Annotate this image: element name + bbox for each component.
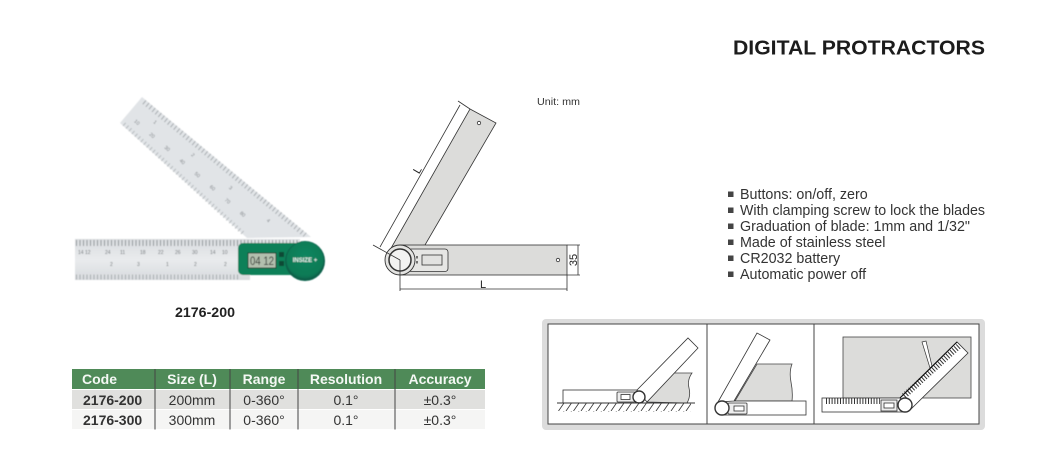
- angled steel blade: 30: [163, 145, 171, 153]
- angled steel blade: 20: [148, 132, 156, 140]
- dimension label: angled L: L: [411, 165, 425, 176]
- display housing: [408, 249, 448, 272]
- feature list: Graduation of blade: 1mm and 1/32": [740, 219, 970, 235]
- table row 2176-300: 300mm: [169, 412, 215, 428]
- horizontal steel blade: 24: [105, 250, 111, 256]
- specification table: [72, 369, 485, 430]
- angled steel blade: 40: [178, 158, 186, 166]
- table header: Size (L): [167, 371, 217, 387]
- table row 2176-300: [72, 410, 485, 429]
- LCD readout: 04 12: [250, 254, 274, 268]
- horizontal steel blade: 1: [166, 262, 169, 268]
- angled steel blade: 80: [238, 211, 246, 219]
- angled steel blade: [120, 97, 311, 238]
- dimension label: 35: 35: [568, 254, 580, 266]
- unit label: Unit: mm: [537, 97, 580, 108]
- table row 2176-200: 200mm: [169, 392, 215, 408]
- horizontal steel blade: 14: [210, 250, 216, 256]
- angled steel blade: 2: [189, 152, 196, 159]
- table header: Accuracy: [408, 371, 472, 387]
- dimension drawing: [373, 101, 580, 291]
- feature list: Automatic power off: [740, 267, 866, 283]
- usage 1: measuring a slope on a surface: [557, 338, 698, 412]
- angled blade outline: [390, 109, 496, 250]
- horizontal steel blade: 11: [120, 250, 125, 256]
- green rotary knob: [285, 241, 325, 281]
- horizontal steel blade: 14 12: [78, 250, 91, 256]
- table row 2176-200: ±0.3°: [424, 392, 456, 408]
- table row 2176-300: ±0.3°: [424, 412, 456, 428]
- horizontal steel blade: 10: [222, 250, 228, 256]
- angled steel blade: 3: [227, 185, 233, 192]
- horizontal steel blade: 18: [140, 250, 146, 256]
- table header: [72, 369, 485, 389]
- product code caption: 2176-200: [175, 304, 235, 320]
- feature list: [728, 187, 985, 283]
- horizontal steel blade: 22: [158, 250, 164, 256]
- horizontal steel blade: 26: [175, 250, 181, 256]
- table header: Range: [243, 371, 286, 387]
- pivot circle: [385, 245, 415, 275]
- angled steel blade: 70: [223, 197, 231, 206]
- table header: Resolution: [310, 371, 382, 387]
- green display housing: [238, 243, 300, 275]
- table row 2176-200: 0-360°: [243, 392, 285, 408]
- title: DIGITAL PROTRACTORS: [733, 38, 985, 60]
- horizontal steel blade: 30: [192, 250, 198, 256]
- horizontal steel blade: 2: [110, 262, 113, 268]
- table row 2176-200: 2176-200: [83, 392, 142, 408]
- horizontal length dimension: [400, 260, 567, 291]
- usage 3: marking a workpiece: [822, 337, 971, 412]
- usage illustration panel: [542, 319, 985, 430]
- feature list: Made of stainless steel: [740, 235, 885, 251]
- product photo: digital protractor: [75, 97, 325, 281]
- table row 2176-300: 0.1°: [333, 412, 359, 428]
- green rotary knob: INSIZE +: [293, 258, 318, 264]
- table row 2176-300: 0-360°: [243, 412, 285, 428]
- angled steel blade: 1: [152, 119, 158, 126]
- horizontal steel blade: 2: [224, 262, 227, 268]
- width dimension: [567, 245, 580, 275]
- feature list: CR2032 battery: [740, 251, 841, 267]
- usage 2: measuring an inside angle: [715, 333, 806, 415]
- horizontal steel blade: 3: [137, 262, 140, 268]
- table row 2176-200: [72, 390, 485, 409]
- angled steel blade: 50: [193, 171, 201, 179]
- horizontal blade body: [400, 245, 567, 275]
- table header: Code: [82, 371, 117, 387]
- table row 2176-300: 2176-300: [83, 412, 142, 428]
- dimension label: horizontal L: L: [480, 279, 486, 291]
- angled steel blade: 4: [265, 218, 271, 224]
- angled steel blade: 10: [132, 119, 141, 127]
- table row 2176-200: 0.1°: [333, 392, 359, 408]
- horizontal steel blade: [75, 239, 300, 280]
- angled steel blade: 60: [208, 184, 216, 193]
- bullet squares: [728, 192, 734, 277]
- feature list: With clamping screw to lock the blades: [740, 203, 985, 219]
- horizontal steel blade: 2: [194, 262, 197, 268]
- angled length dimension: [373, 101, 470, 260]
- feature list: Buttons: on/off, zero: [740, 187, 868, 203]
